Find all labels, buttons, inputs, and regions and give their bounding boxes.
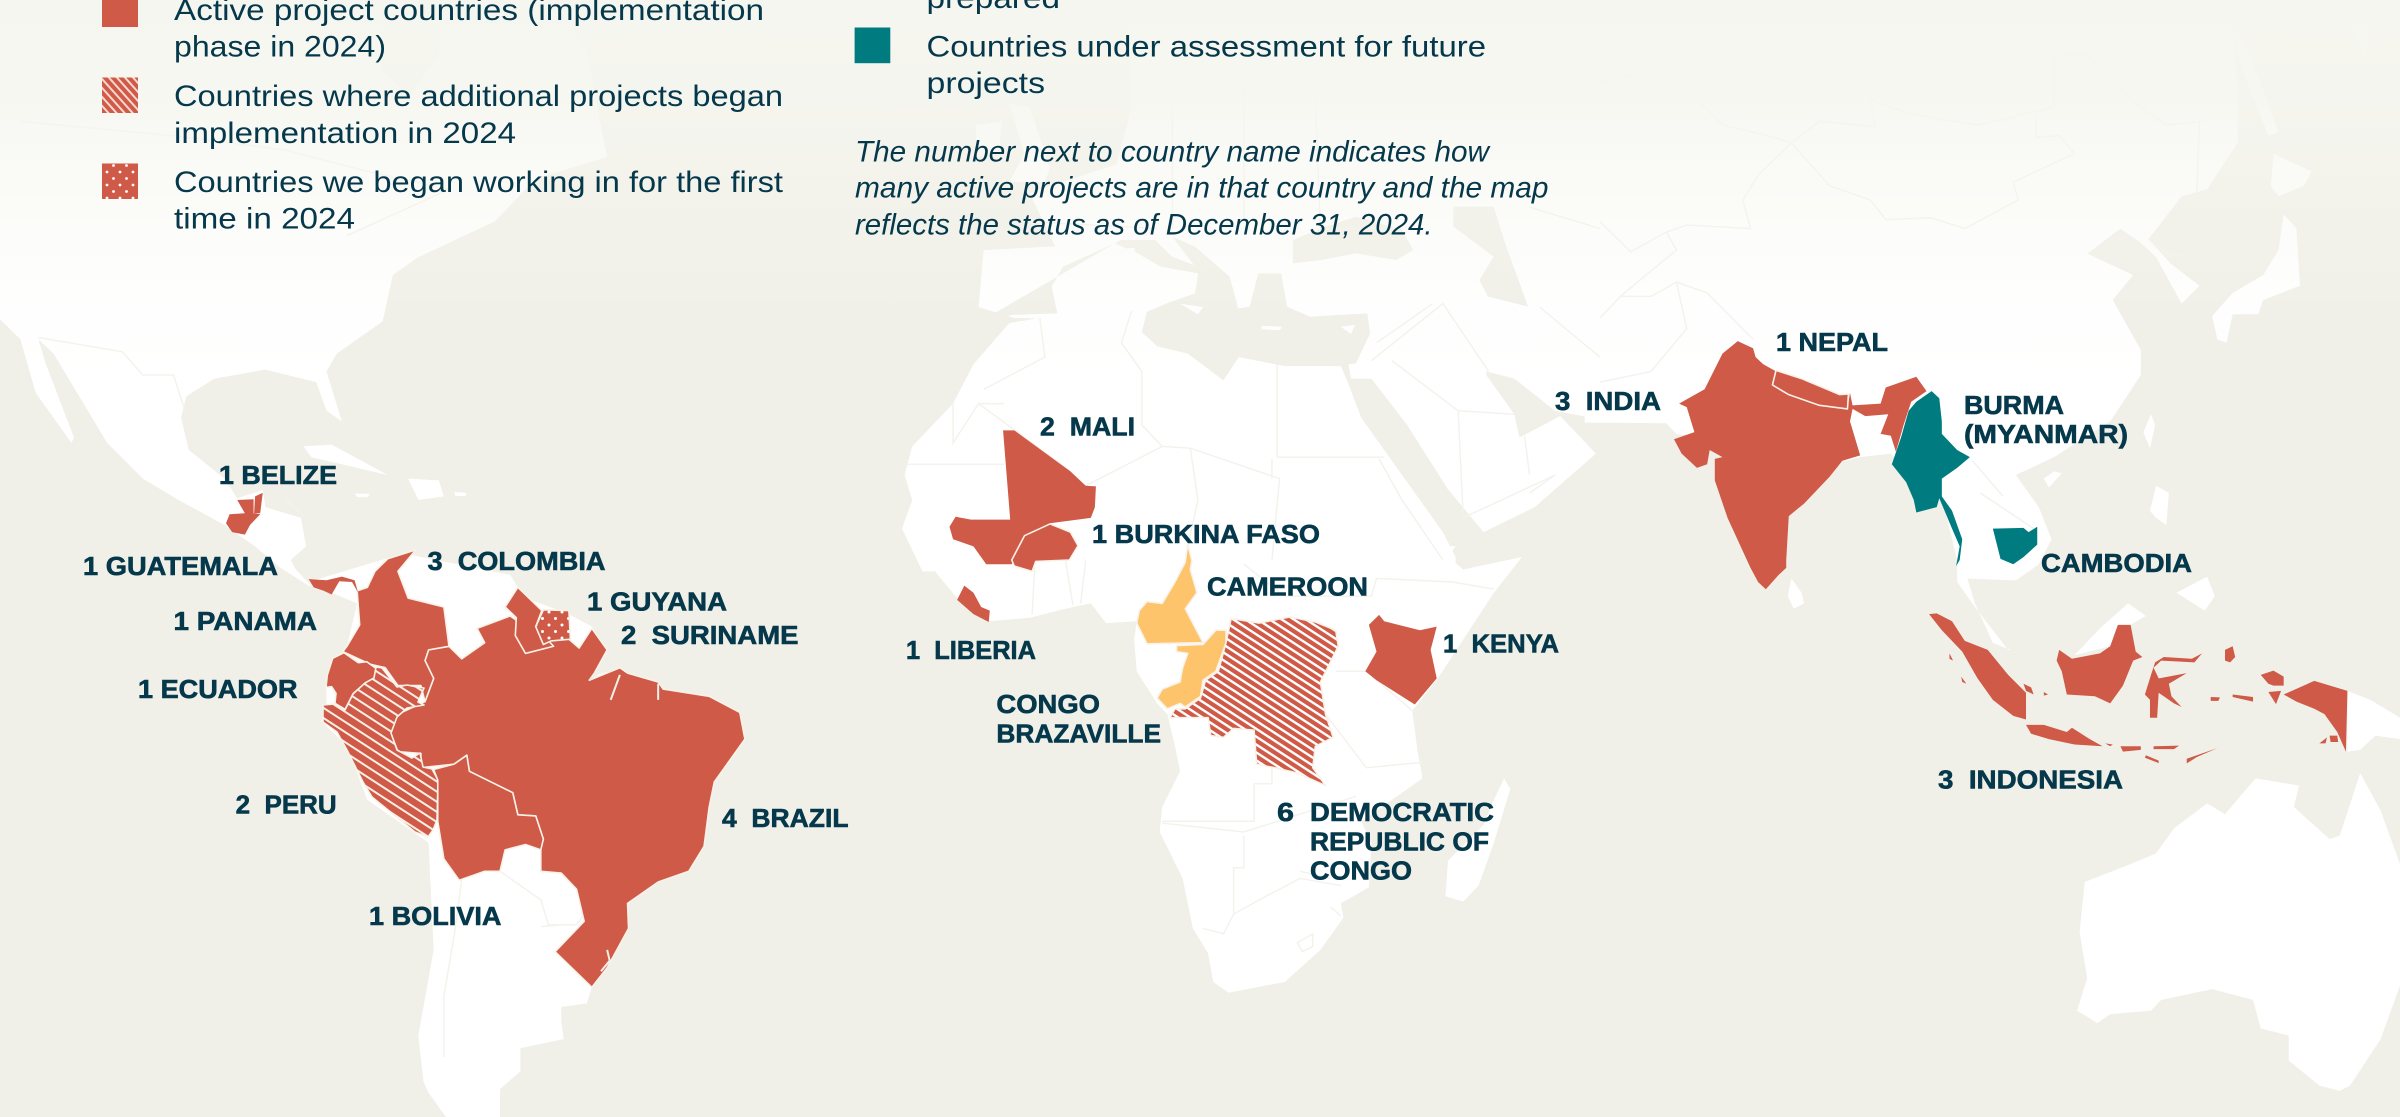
country: India bbox=[1674, 341, 1927, 589]
legend: right column bbox=[855, 0, 1548, 242]
label: Guatemala: 1 GUATEMALA bbox=[83, 553, 278, 581]
country: Belize bbox=[254, 493, 263, 513]
label: Suriname: 2 SURINAME bbox=[621, 622, 798, 650]
label: Burma (Myanmar) bbox=[1964, 392, 2128, 449]
country: Colombia bbox=[343, 550, 449, 702]
country: Burma (Myanmar) bbox=[1892, 391, 1970, 566]
land: Sri Lanka, Philippines, Borneo north, Papua New Guinea bbox=[1788, 577, 2400, 752]
country: Ecuador bbox=[326, 653, 376, 709]
land: Caribbean islands bbox=[304, 445, 467, 500]
faint country borders: Africa bbox=[905, 311, 1443, 560]
label: Democratic Republic of Congo: DEMOCRATIC bbox=[1310, 799, 1494, 827]
label: Kenya: 1 KENYA bbox=[1443, 630, 1559, 658]
country: Indonesia bbox=[1929, 613, 2347, 763]
legend item: active project countries bbox=[102, 0, 764, 64]
faint country borders: southern Africa bbox=[1032, 559, 1494, 952]
label: Cambodia: CAMBODIA bbox=[2041, 550, 2192, 578]
country: Kenya bbox=[1365, 615, 1437, 704]
sea: Mediterranean bbox=[966, 237, 1370, 380]
country: Peru bbox=[323, 667, 438, 837]
legend item: active project countries: phase in 2024) bbox=[174, 30, 386, 64]
country: Cameroon bbox=[1137, 545, 1203, 644]
faint country borders: Asia bbox=[1600, 54, 2199, 529]
legend item: first-time countries: time in 2024 bbox=[174, 202, 355, 236]
legend note: The number next to country name indicates how bbox=[855, 136, 1491, 168]
label: Guyana: 1 GUYANA bbox=[587, 588, 727, 616]
label: Nepal: 1 NEPAL bbox=[1776, 329, 1888, 357]
country: Panama bbox=[309, 577, 358, 594]
land: North America bbox=[0, 0, 607, 586]
country: Brazil bbox=[390, 587, 745, 987]
land: South America bbox=[309, 553, 745, 1117]
label: Democratic Republic of Congo bbox=[1277, 799, 1494, 886]
label: Congo Brazaville bbox=[996, 691, 1161, 748]
legend item: countries under assessment: Countries under assessment for future bbox=[926, 30, 1486, 64]
label: Democratic Republic of Congo: 6 bbox=[1277, 799, 1294, 827]
country: Congo Brazzaville bbox=[1157, 630, 1226, 709]
label: Peru: 2 PERU bbox=[236, 792, 337, 820]
label: Colombia: 3 COLOMBIA bbox=[428, 548, 606, 576]
land: East Asian islands bbox=[2044, 0, 2381, 525]
label: Belize: 1 BELIZE bbox=[219, 462, 337, 490]
land: Australia bbox=[2077, 773, 2400, 1091]
country: Cambodia bbox=[1993, 527, 2037, 564]
Amazon delta and lagoon details bbox=[589, 664, 658, 971]
country: Guatemala bbox=[226, 499, 260, 535]
faint country borders: South America bbox=[444, 871, 584, 1057]
faint country borders: Middle East and Europe bbox=[1030, 86, 1600, 518]
country: Bolivia bbox=[434, 755, 543, 880]
label: Bolivia: 1 BOLIVIA bbox=[369, 903, 502, 931]
label: Burma (Myanmar): BURMA bbox=[1964, 392, 2064, 420]
country: Burkina Faso bbox=[1012, 524, 1078, 571]
label: Congo Brazaville: CONGO bbox=[996, 691, 1100, 719]
legend note: reflects the status as of December 31, 2024. bbox=[855, 208, 1432, 242]
legend item: additional projects: implementation in 2024 bbox=[174, 117, 516, 150]
sea: Hudson Bay bbox=[383, 21, 439, 96]
legend item: first-time countries: Countries we began working in for the first bbox=[174, 166, 784, 199]
land: Africa south bbox=[917, 546, 1522, 993]
label: Congo Brazaville: BRAZAVILLE bbox=[996, 720, 1161, 748]
label: Burma (Myanmar): (MYANMAR) bbox=[1964, 421, 2128, 449]
label: Ecuador: 1 ECUADOR bbox=[138, 676, 298, 704]
legend item: countries under assessment: projects bbox=[926, 67, 1045, 100]
land: Madagascar bbox=[1445, 778, 1510, 902]
legend item: additional projects bbox=[102, 78, 783, 150]
legend note bbox=[855, 136, 1548, 242]
label: Democratic Republic of Congo: REPUBLIC OF bbox=[1310, 828, 1489, 856]
legend item: first-time countries bbox=[102, 164, 784, 236]
fade overlay over top of map bbox=[0, 0, 2400, 380]
label: Indonesia: 3 INDONESIA bbox=[1938, 766, 2123, 794]
highlighted countries bbox=[226, 341, 2347, 987]
label: Burkina Faso: 1 BURKINA FASO bbox=[1092, 521, 1320, 549]
land: Europe and Middle East bbox=[979, 0, 1616, 532]
land: Asia bbox=[1585, 0, 2238, 650]
legend note: many active projects are in that country and the map bbox=[855, 172, 1548, 204]
land: UK, Ireland and Mediterranean islands bbox=[976, 104, 1355, 334]
sea: Black Sea and Caspian bbox=[1293, 207, 1528, 307]
country: Nepal bbox=[1772, 370, 1848, 409]
country: Liberia bbox=[957, 586, 990, 622]
faint country borders: North America bbox=[20, 121, 449, 518]
country labels bbox=[83, 329, 2192, 931]
legend: left column bbox=[102, 0, 784, 236]
legend item: additional projects: Countries where additional projects began bbox=[174, 80, 783, 113]
label: Cameroon: CAMEROON bbox=[1207, 574, 1368, 602]
country: Democratic Republic of Congo bbox=[1170, 617, 1338, 786]
label: Liberia: 1 LIBERIA bbox=[906, 637, 1036, 665]
label: India: 3 INDIA bbox=[1555, 388, 1661, 416]
legend item: countries under assessment bbox=[855, 28, 1486, 100]
label: Mali: 2 MALI bbox=[1040, 414, 1135, 442]
label: Panama: 1 PANAMA bbox=[174, 608, 317, 636]
label: Democratic Republic of Congo: CONGO bbox=[1310, 858, 1412, 886]
land: Africa north bbox=[902, 311, 1456, 571]
country: Guyana bbox=[505, 587, 554, 653]
country: Suriname bbox=[536, 610, 570, 644]
country: Mali bbox=[949, 430, 1096, 564]
label: Brazil: 4 BRAZIL bbox=[722, 805, 848, 833]
